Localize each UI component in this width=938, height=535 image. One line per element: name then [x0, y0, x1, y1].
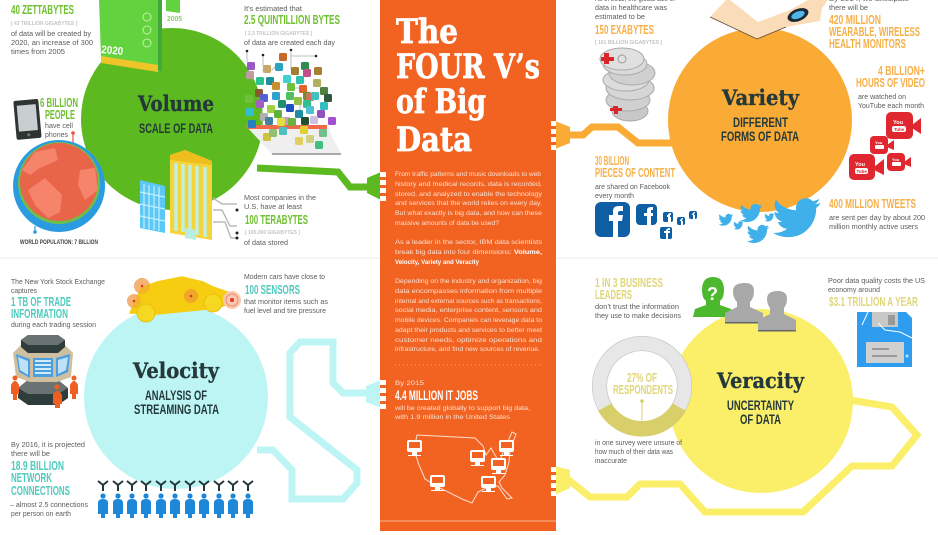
text: stock exchange: The New York Stock Exchange: [11, 279, 105, 286]
text: poor data quality: Poor data quality costs the US: [828, 278, 925, 285]
text: intro paragraph: stored, and analyzed to enable the technology: [395, 191, 543, 198]
text: 100 terabytes: 100 TERABYTES: [245, 213, 308, 227]
text: pieces of content: 30 BILLION: [595, 154, 629, 168]
title: The: [396, 12, 458, 52]
text: 6 billion people: [40, 96, 78, 139]
caption: world population: WORLD POPULATION: 7 BILLION: [20, 239, 98, 246]
text: 40 zettabytes: [11, 3, 93, 56]
subheading: analysis of streaming data: STREAMING DATA: [134, 402, 219, 417]
text: 6 billion people: 6 BILLION: [40, 96, 78, 110]
subheading: different forms of data: [721, 115, 799, 144]
title: FOUR V’s: [396, 47, 540, 87]
icons: business leaders: [693, 277, 796, 332]
chart: 27% donut: 27% OF: [627, 371, 657, 385]
text: 100 terabytes: [244, 195, 316, 247]
text: 2.5 quintillion bytes: 2.5 QUINTILLION BYTES: [244, 13, 340, 27]
connector: volume to centre: [257, 168, 370, 187]
text: network connections: per person on earth: [11, 511, 71, 518]
subheading: uncertainty of data: UNCERTAINTY: [727, 398, 794, 413]
connector tabs on panel edges: [380, 121, 556, 496]
text: sources paragraph: [395, 278, 542, 353]
text: wearable monitors: 420 MILLION: [829, 13, 881, 27]
text: sources paragraph: internal and external sources such as transactions,: [395, 298, 542, 305]
illustration: stack of medical discs: [600, 48, 655, 121]
text: 100 terabytes: Most companies in the: [244, 195, 316, 202]
text: 100 sensors: Modern cars have close to: [244, 274, 325, 281]
text: 100 terabytes: U.S. have at least: [244, 204, 302, 211]
text: 150 exabytes: [595, 0, 675, 46]
text: business leaders: LEADERS: [595, 288, 632, 302]
text: business leaders: [595, 276, 682, 320]
text: poor data quality: economy around: [828, 287, 880, 294]
text: intro paragraph: and services that the world relies on every day.: [395, 200, 542, 207]
icons: business leaders: ?: [707, 284, 718, 304]
icons: youtube cameras: Tube: [856, 169, 867, 174]
icons: youtube cameras: [849, 112, 921, 180]
text: intro paragraph: But what exactly is big data, and how can these: [395, 210, 542, 217]
text: pieces of content: PIECES OF CONTENT: [595, 166, 675, 180]
text: 6 billion people: phones: [45, 132, 68, 139]
chart: 27% donut: [592, 336, 692, 436]
text: dimensions paragraph: break big data into four dimensions: Volume,: [395, 249, 542, 256]
text: pieces of content: [595, 154, 675, 200]
text: 40 zettabytes: 40 ZETTABYTES: [11, 3, 74, 17]
illustration: US map with monitors: [407, 432, 516, 503]
text: survey: in one survey were unsure of: [595, 440, 682, 447]
heading: volume: Volume: [137, 92, 214, 117]
text: 2.5 quintillion bytes: [244, 6, 340, 47]
text: 40 zettabytes: times from 2005: [11, 49, 65, 56]
text: IT jobs: will be created globally to support big data,: [394, 405, 530, 412]
connector: velocity to centre: [257, 342, 367, 499]
volume circle: [81, 28, 263, 210]
text: sources paragraph: social media, enterprise content, sensors and: [395, 307, 542, 314]
text: 150 exabytes: estimated to be: [595, 14, 645, 21]
text: network connections: By 2016, it is projected: [11, 442, 85, 449]
text: stock exchange: [11, 279, 105, 329]
text: 40 zettabytes: 2020, an increase of 300: [11, 40, 93, 47]
text: sources paragraph: mobile devices. Companies can leverage data to: [395, 317, 542, 324]
text: survey: how much of their data was: [595, 449, 673, 456]
text: sources paragraph: infrastructure, and find new sources of revenue.: [395, 346, 540, 353]
text: sources paragraph: data encompasses information from multiple: [395, 288, 542, 295]
text: 100 sensors: [244, 274, 329, 315]
text: sources paragraph: Depending on the industry and organization, big: [395, 278, 542, 285]
panel: variety: [555, 0, 925, 243]
subheading: uncertainty of data: [727, 398, 794, 427]
text: intro paragraph: massive amounts of data be used?: [395, 220, 499, 227]
variety circle: [668, 28, 852, 212]
text: dimensions paragraph: [395, 239, 543, 266]
text: hours of video: [856, 64, 925, 110]
title: [396, 12, 540, 160]
text: pieces of content: every month: [595, 193, 634, 200]
text: pieces of content: are shared on Facebook: [595, 184, 670, 191]
icon: mobile phone: [13, 99, 42, 140]
text: 6 billion people: have cell: [45, 123, 73, 130]
panel: volume: [11, 0, 381, 247]
text: 100 sensors: that monitor items such as: [244, 299, 329, 306]
text: network connections: NETWORK: [11, 471, 52, 485]
text: stock exchange: INFORMATION: [11, 307, 68, 321]
text: 2.5 quintillion bytes: [ 2.3 TRILLION GIGABYTES ]: [245, 31, 312, 37]
text: 100 terabytes: [ 100,000 GIGABYTES ]: [245, 230, 300, 236]
icon: 2005 storage card: [166, 0, 182, 23]
text: 100 terabytes: of data stored: [244, 240, 288, 247]
connector: veracity to centre: [565, 400, 917, 512]
heading: variety: Variety: [721, 86, 799, 111]
text: survey: [595, 440, 682, 465]
text: 40 zettabytes: of data will be created by: [11, 31, 92, 38]
illustration: car with sensors: [127, 277, 241, 322]
text: IT jobs: 4.4 MILLION IT JOBS: [395, 387, 478, 403]
veracity circle: [669, 309, 853, 493]
text: intro paragraph: history and medical records, data is recorded,: [395, 181, 542, 188]
subheading: scale of data: SCALE OF DATA: [139, 121, 213, 136]
text: 2.5 quintillion bytes: of data are created each day: [244, 40, 336, 47]
icon: cracked floppy disk: [857, 312, 912, 367]
plug: variety: [555, 121, 570, 149]
chart: 27% donut: RESPONDENTS: [613, 383, 673, 397]
text: IT jobs: with 1.9 million in the United States: [394, 414, 511, 421]
connector: variety to centre: [565, 127, 672, 143]
subheading: uncertainty of data: OF DATA: [740, 412, 781, 427]
icons: youtube cameras: You: [875, 140, 883, 145]
subheading: different forms of data: DIFFERENT: [733, 115, 789, 130]
plug: velocity: [366, 380, 381, 408]
icon: 2005 storage card: 2005: [167, 16, 182, 23]
text: intro paragraph: From traffic patterns and music downloads to web: [395, 171, 541, 178]
icons: youtube cameras: You: [892, 157, 900, 162]
subheading: analysis of streaming data: ANALYSIS OF: [145, 388, 207, 403]
subheading: analysis of streaming data: [134, 388, 219, 417]
text: network connections: [10, 442, 89, 518]
panel: veracity: [555, 276, 925, 512]
velocity circle: [84, 305, 268, 489]
illustration: arm with wearable monitor: [710, 0, 828, 39]
text: 6 billion people: PEOPLE: [45, 108, 75, 122]
icons: youtube cameras: You: [893, 120, 903, 126]
text: intro paragraph: [395, 171, 543, 227]
text: survey: inaccurate: [595, 458, 627, 465]
text: stock exchange: during each trading session: [11, 322, 96, 329]
text: 40 zettabytes: [ 43 TRILLION GIGABYTES ]: [11, 21, 77, 27]
text: network connections: – almost 2.5 connections: [10, 502, 89, 509]
text: 150 exabytes: 150 EXABYTES: [595, 23, 654, 37]
text: 100 sensors: fuel level and tire pressure: [244, 308, 326, 315]
illustration: office buildings: [140, 150, 238, 240]
text: 400 million tweets: million monthly active users: [829, 224, 919, 231]
icons: youtube cameras: You: [855, 162, 865, 168]
text: IT jobs: [394, 380, 530, 421]
text: 400 million tweets: [829, 197, 925, 231]
text: 400 million tweets: are sent per day by about 200: [829, 215, 925, 222]
text: 100 sensors: 100 SENSORS: [245, 283, 300, 297]
text: wearable monitors: [829, 0, 920, 51]
plug: volume: [367, 172, 381, 200]
icon: globe: [13, 131, 105, 234]
text: business leaders: don't trust the information: [595, 304, 679, 311]
text: network connections: CONNECTIONS: [11, 484, 70, 498]
icons: twitter birds: [719, 198, 820, 243]
text: sources paragraph: adapt their products and services to better meet: [395, 327, 542, 334]
text: IT jobs: By 2015: [395, 380, 424, 387]
panel: velocity: [10, 274, 381, 518]
text: sources paragraph: customer needs, optimize operations and: [395, 337, 542, 344]
heading: veracity: Veracity: [716, 369, 804, 394]
text: network connections: there will be: [11, 451, 50, 458]
illustration: trading floor: [11, 335, 78, 408]
text: poor data quality: [828, 278, 925, 309]
text: 150 exabytes: data in healthcare was: [595, 5, 668, 12]
icon: 2020 storage card: [99, 0, 162, 72]
subheading: different forms of data: FORMS OF DATA: [721, 129, 799, 144]
heading: velocity: Velocity: [132, 359, 219, 384]
panel: intro column: [380, 0, 556, 531]
text: business leaders: 1 IN 3 BUSINESS: [595, 276, 663, 290]
icons: facebook logos: [595, 202, 697, 239]
plug: veracity: [555, 466, 570, 495]
title: Data: [396, 120, 472, 160]
text: 150 exabytes: [ 161 BILLION GIGABYTES ]: [595, 40, 662, 46]
title: of Big: [396, 82, 486, 122]
text: dimensions paragraph: Velocity, Variety and Veracity: [395, 259, 479, 266]
icon: 2020 storage card: 2020: [101, 44, 124, 58]
text: wearable monitors: there will be: [829, 5, 868, 12]
text: dimensions paragraph: As a leader in the sector, IBM data scientists: [395, 239, 543, 246]
illustration: data cubes on grid: [245, 49, 341, 155]
text: stock exchange: captures: [11, 288, 37, 295]
icons: youtube cameras: Tube: [894, 127, 905, 132]
text: hours of video: YouTube each month: [858, 103, 924, 110]
text: stock exchange: 1 TB OF TRADE: [11, 295, 71, 309]
text: business leaders: they use to make decisions: [595, 313, 682, 320]
text: network connections: 18.9 BILLION: [11, 459, 64, 473]
text: 2.5 quintillion bytes: It's estimated that: [244, 6, 302, 13]
icon row: people with connections: [98, 481, 253, 518]
text: hours of video: are watched on: [858, 94, 906, 101]
